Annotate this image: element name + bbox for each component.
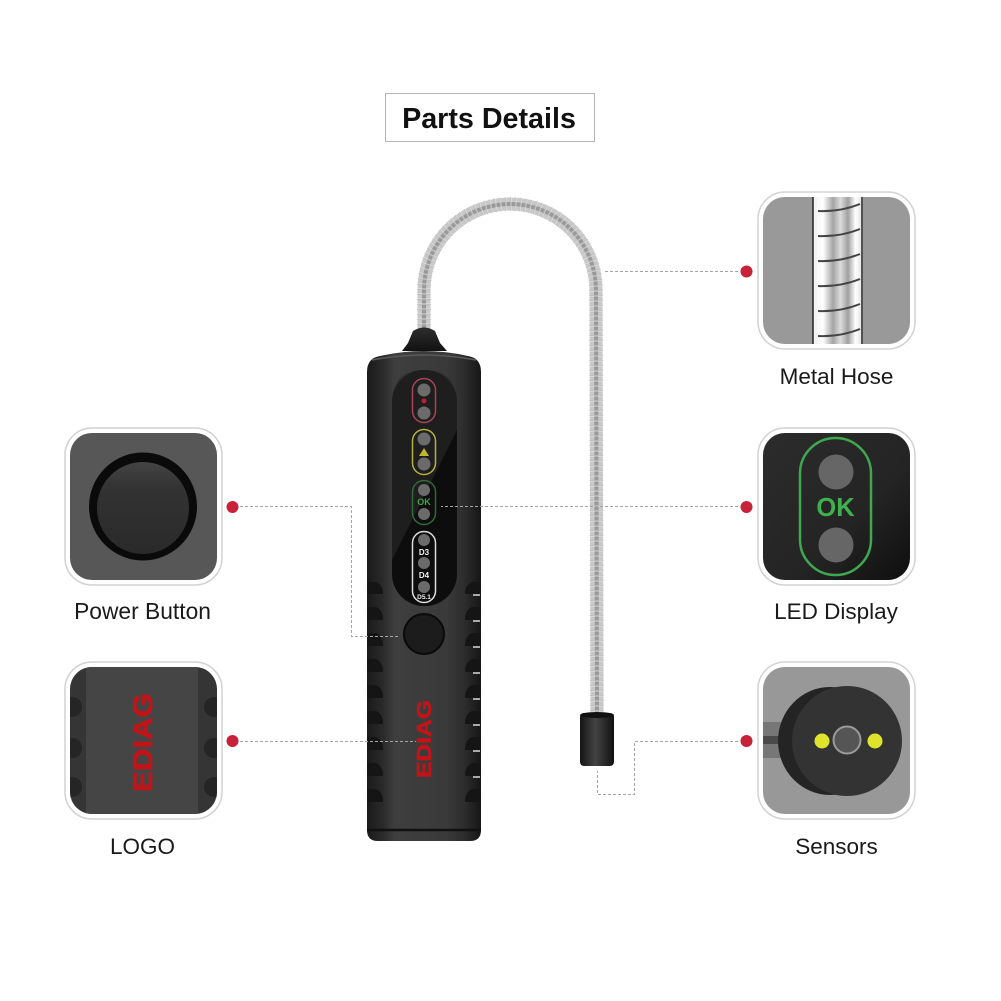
panel: sensors bbox=[758, 662, 915, 819]
tester nozzle bbox=[402, 328, 447, 351]
label: metal hose: Metal Hose bbox=[780, 364, 893, 389]
led group: white: D3 bbox=[419, 548, 430, 557]
label: logo: LOGO bbox=[110, 834, 175, 859]
metal hose bbox=[424, 204, 597, 712]
led group: red bbox=[412, 378, 436, 422]
grip ridges right bbox=[465, 582, 481, 802]
label: LED display: LED Display bbox=[774, 599, 899, 624]
led group: OK bbox=[412, 480, 436, 524]
led group: white: D4 bbox=[419, 571, 430, 580]
leader lines bbox=[240, 272, 738, 794]
led group: OK: OK bbox=[417, 497, 431, 507]
grip highlights bbox=[473, 594, 480, 778]
body power button bbox=[404, 614, 444, 654]
title bbox=[386, 94, 594, 142]
title: Parts Details bbox=[402, 103, 576, 135]
led group: white bbox=[412, 532, 436, 602]
panel: power button bbox=[65, 428, 222, 585]
sensor cap bbox=[580, 712, 614, 766]
panel: logo bbox=[62, 662, 224, 819]
label: sensors: Sensors bbox=[795, 834, 878, 859]
led group: white: D5.1 bbox=[417, 594, 431, 601]
panel: metal hose bbox=[758, 192, 915, 349]
led group: yellow bbox=[412, 430, 436, 474]
display panel bbox=[392, 370, 457, 606]
grip ridges left bbox=[367, 582, 383, 802]
label: power button: Power Button bbox=[74, 598, 211, 624]
body logo: EDIAG bbox=[414, 700, 436, 778]
panel: LED display: OK bbox=[816, 494, 855, 522]
panel: LED display bbox=[758, 428, 915, 585]
marker dots bbox=[226, 266, 752, 747]
tester body bbox=[367, 351, 481, 841]
panel: logo: EDIAG bbox=[128, 693, 158, 792]
